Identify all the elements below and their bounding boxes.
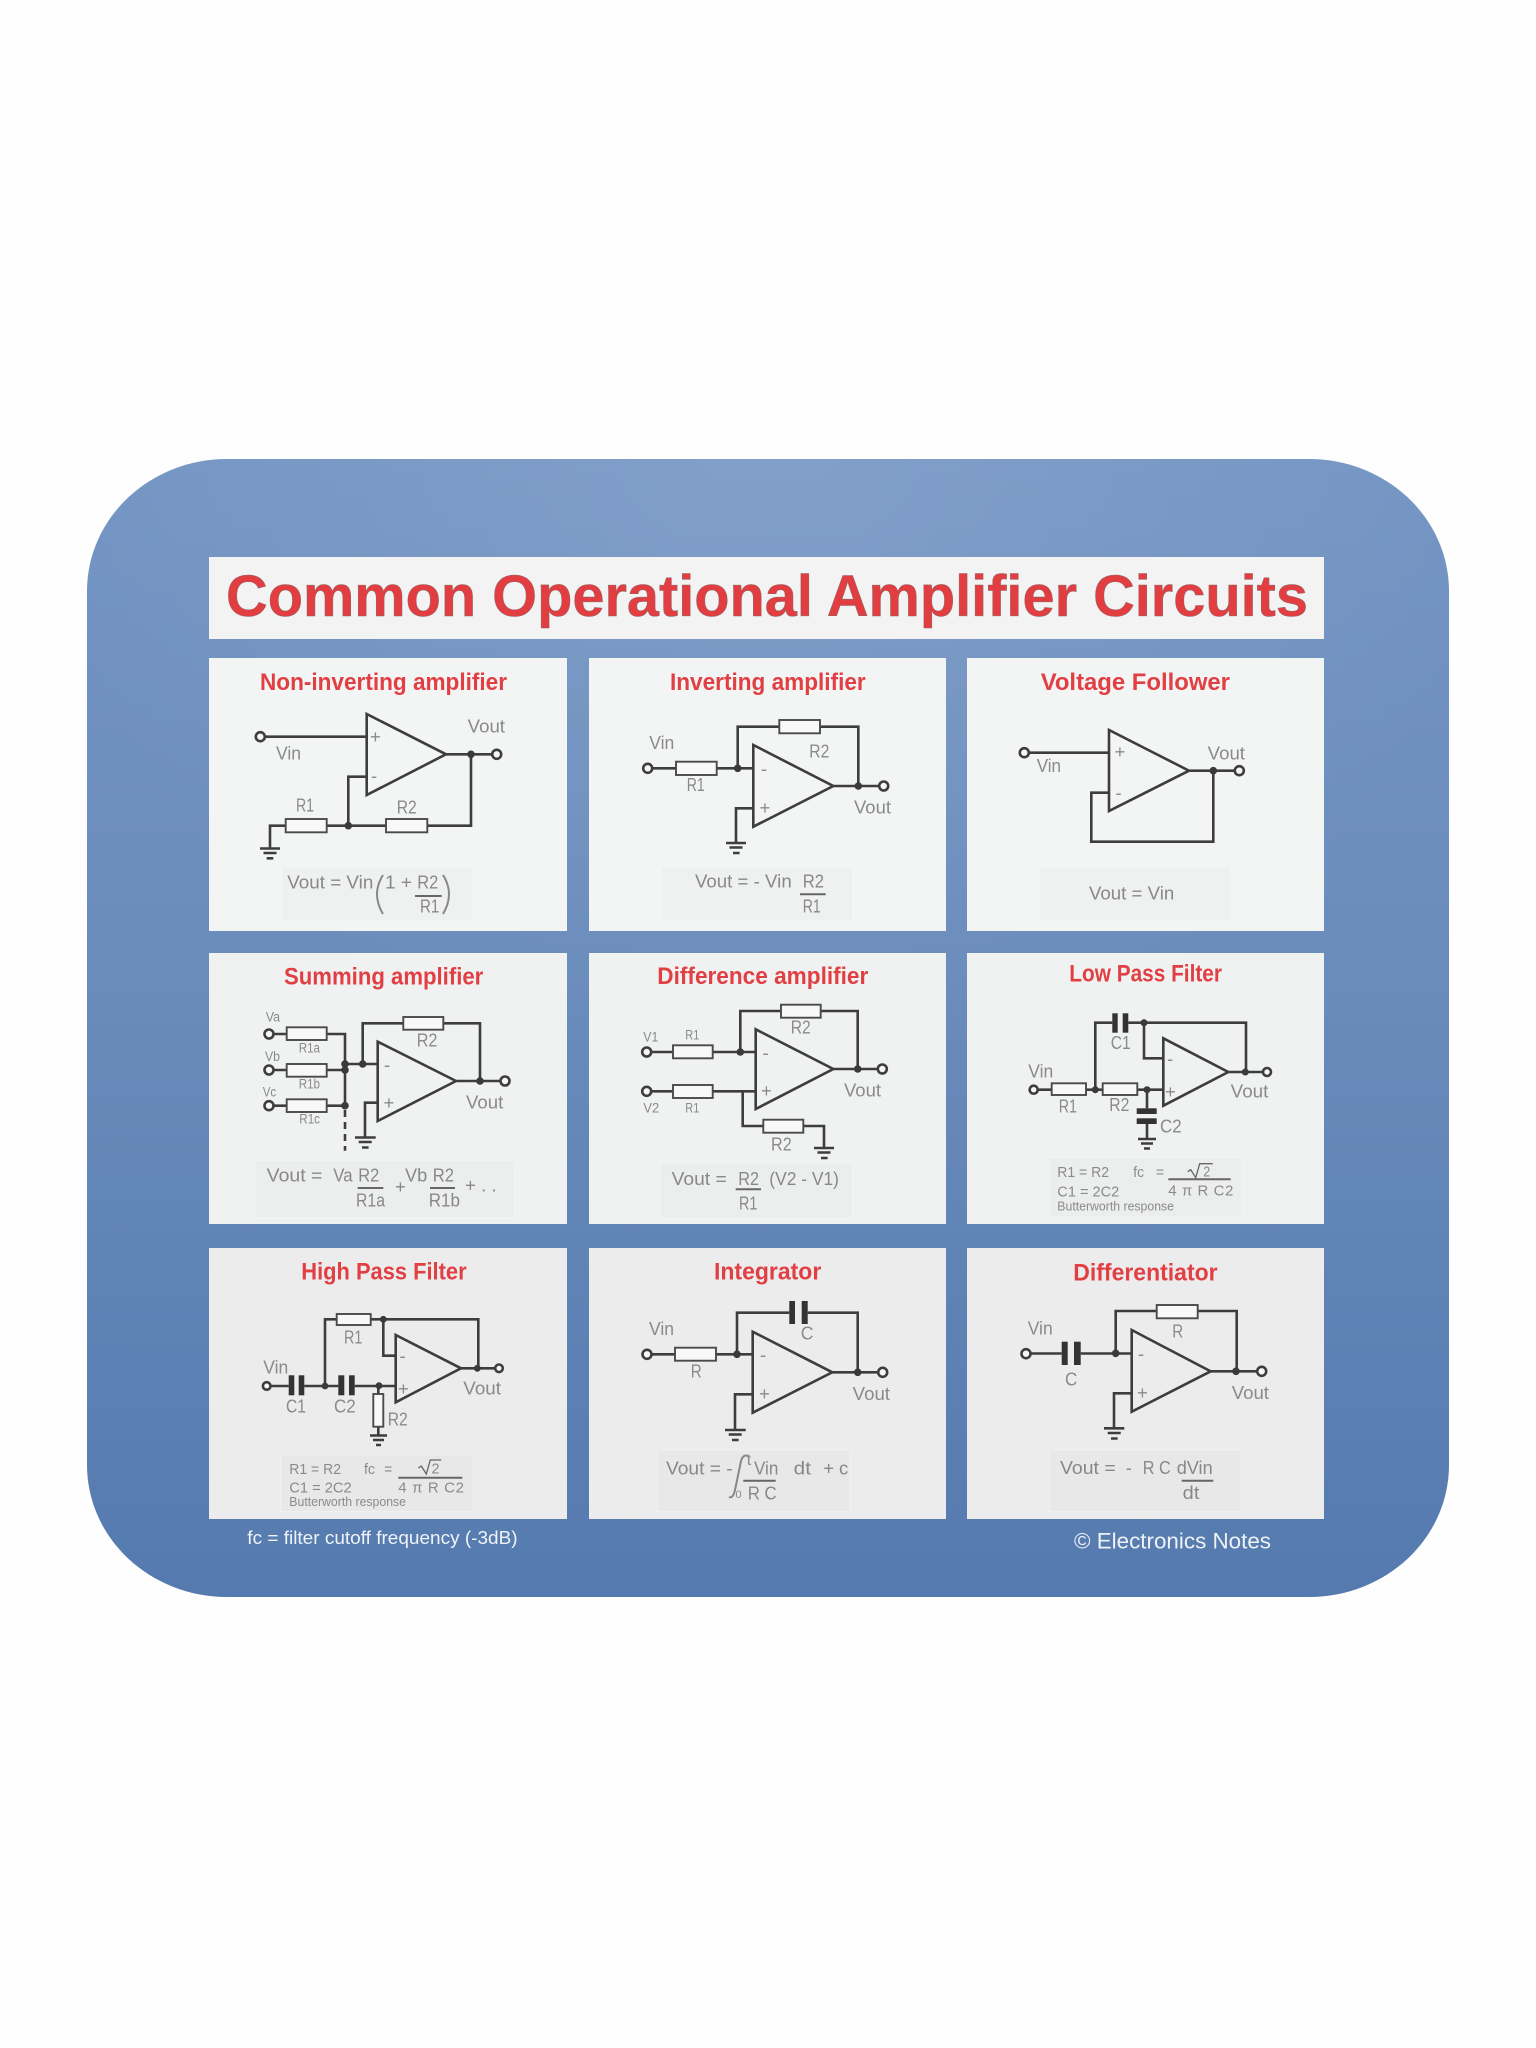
circuit diagram: R1c [299, 1112, 320, 1127]
formula: R2 [803, 871, 824, 892]
circuit diagram [642, 1005, 887, 1158]
panel: summing amplifier [209, 953, 567, 1224]
circuit diagram: - [1138, 1343, 1144, 1364]
formula: dVin [1177, 1457, 1213, 1478]
formula: R2 [358, 1165, 379, 1186]
heading: Non-inverting amplifier [260, 669, 507, 696]
circuit diagram: C [1065, 1368, 1077, 1389]
formula [661, 867, 852, 921]
circuit diagram: Vout [854, 797, 891, 818]
formula [282, 867, 473, 921]
circuit diagram: Vin [263, 1356, 288, 1377]
formula [657, 1450, 850, 1512]
circuit diagram: Va [266, 1010, 280, 1025]
formula: R1 = R2 [1057, 1164, 1109, 1181]
formula: C1 = 2C2 [1057, 1184, 1119, 1201]
circuit diagram: R2 [1109, 1094, 1129, 1115]
circuit diagram: Vout [844, 1080, 881, 1101]
circuit diagram: Vb [265, 1049, 280, 1064]
formula: t [747, 1452, 752, 1469]
panel: difference amplifier [589, 953, 946, 1224]
circuit diagram: V1 [643, 1030, 658, 1045]
formula: dt [1183, 1482, 1199, 1503]
circuit diagram: R1 [344, 1327, 362, 1348]
circuit diagram: R1 [687, 774, 705, 795]
circuit diagram: + [398, 1378, 409, 1399]
formula: Vout = [267, 1165, 322, 1186]
circuit diagram: C1 [1111, 1032, 1131, 1053]
formula: Va [333, 1165, 353, 1186]
circuit diagram [643, 720, 891, 853]
circuit diagram: C2 [334, 1395, 356, 1416]
circuit diagram: Vout [1232, 1382, 1269, 1403]
formula: 2 [1203, 1164, 1210, 1181]
circuit diagram: Vin [649, 1318, 674, 1339]
formula: Vout = Vin [1089, 882, 1174, 903]
formula [255, 1161, 514, 1217]
panel: voltage follower [967, 658, 1324, 931]
circuit diagram: R [1172, 1321, 1183, 1342]
circuit diagram: - [371, 765, 377, 786]
formula: 1 + [385, 872, 412, 893]
formula: R1 [803, 895, 821, 916]
circuit diagram: R1b [299, 1076, 320, 1091]
formula [281, 1455, 473, 1512]
circuit diagram: R2 [388, 1409, 408, 1430]
panel: inverting amplifier [589, 658, 946, 931]
heading: Voltage Follower [1041, 669, 1230, 696]
circuit diagram [642, 1301, 890, 1440]
circuit diagram: R2 [417, 1030, 437, 1051]
panel: high pass filter [209, 1248, 567, 1519]
circuit diagram [1028, 1013, 1271, 1148]
heading: Summing amplifier [284, 963, 483, 990]
circuit diagram: - [384, 1054, 390, 1075]
formula: 0 [736, 1489, 742, 1501]
formula: 2 [432, 1460, 440, 1478]
formula: Vout = [1060, 1457, 1116, 1478]
title banner [209, 557, 1324, 639]
circuit diagram: Vin [1037, 755, 1061, 776]
formula: - [1126, 1457, 1132, 1478]
circuit diagram: + [759, 1383, 770, 1404]
circuit diagram: Vin [649, 732, 674, 753]
circuit diagram: R1 [296, 795, 314, 816]
formula: Butterworth response [1057, 1200, 1174, 1214]
circuit diagram: + [1137, 1382, 1148, 1403]
formula: R1 = R2 [289, 1461, 341, 1478]
circuit diagram: R [691, 1360, 702, 1381]
circuit diagram: R2 [771, 1134, 792, 1155]
formula: R1 [739, 1192, 757, 1213]
circuit diagram: + [761, 1080, 772, 1101]
circuit diagram [263, 1314, 503, 1445]
circuit diagram: Vout [466, 1092, 503, 1113]
circuit diagram: Vout [463, 1377, 501, 1398]
formula: fc [1133, 1164, 1144, 1181]
heading: High Pass Filter [301, 1258, 467, 1285]
formula: R C [748, 1482, 777, 1503]
formula: R1a [356, 1190, 386, 1211]
footnote: filter cutoff: fc = filter cutoff frequency (-3dB) [247, 1527, 518, 1548]
formula: Vb [405, 1165, 427, 1186]
formula: + [395, 1176, 406, 1197]
circuit diagram: R2 [791, 1016, 811, 1037]
circuit diagram: C2 [1160, 1115, 1182, 1136]
formula: (V2 - V1) [769, 1168, 839, 1189]
circuit diagram [263, 1010, 510, 1151]
formula [660, 1162, 852, 1218]
circuit diagram: R2 [397, 796, 417, 817]
circuit diagram: + [1165, 1081, 1176, 1102]
circuit diagram: Vin [276, 742, 301, 763]
circuit diagram: - [1167, 1048, 1173, 1069]
circuit diagram [256, 714, 505, 858]
formula: R2 [433, 1165, 454, 1186]
circuit diagram: - [1116, 782, 1122, 803]
panel: non-inverting amplifier [209, 658, 567, 931]
heading: Low Pass Filter [1069, 961, 1222, 988]
panel: integrator [589, 1248, 946, 1519]
heading: Integrator [714, 1258, 821, 1285]
formula: Butterworth response [289, 1495, 406, 1509]
mouse mat background [87, 459, 1449, 1597]
formula: C1 = 2C2 [289, 1480, 352, 1497]
circuit diagram: Vc [263, 1085, 276, 1100]
formula: dt [794, 1457, 811, 1478]
formula: 4 π R C2 [1168, 1182, 1233, 1199]
circuit diagram: - [762, 1042, 769, 1063]
formula: 4 π R C2 [398, 1480, 464, 1497]
title: Common Operational Amplifier Circuits [226, 564, 1308, 629]
formula: R C [1143, 1457, 1171, 1478]
circuit diagram: C [801, 1322, 813, 1343]
heading: Inverting amplifier [670, 669, 866, 696]
circuit diagram: Vin [1028, 1317, 1053, 1338]
circuit diagram: Vout [1208, 743, 1245, 764]
formula: Vout = Vin [287, 872, 373, 893]
formula: R2 [738, 1168, 759, 1189]
formula [1049, 1157, 1242, 1217]
formula: + . . [465, 1175, 497, 1196]
formula: fc [364, 1461, 375, 1478]
circuit diagram [1020, 730, 1245, 842]
circuit diagram: Vin [1028, 1060, 1053, 1081]
circuit diagram [1022, 1305, 1269, 1438]
circuit diagram: Vout [468, 716, 505, 737]
circuit diagram: Vout [853, 1383, 890, 1404]
formula: Vout = - [666, 1457, 733, 1478]
circuit diagram: R1 [685, 1101, 699, 1116]
formula: R1 [420, 896, 439, 917]
panel: differentiator [967, 1248, 1324, 1519]
formula: R2 [417, 872, 438, 893]
circuit diagram: + [760, 797, 770, 818]
panel: low pass filter [967, 953, 1324, 1224]
formula: Vout = [672, 1168, 727, 1189]
circuit diagram: + [1114, 741, 1125, 762]
circuit diagram: Vout [1231, 1081, 1268, 1102]
formula [1049, 1450, 1242, 1512]
circuit diagram: R1 [1059, 1095, 1077, 1116]
circuit diagram: - [400, 1345, 406, 1366]
circuit diagram: - [760, 1344, 766, 1365]
heading: Difference amplifier [657, 963, 868, 990]
circuit diagram: C1 [286, 1395, 306, 1416]
circuit diagram: + [384, 1092, 394, 1113]
circuit diagram: R2 [809, 740, 829, 761]
formula [1039, 867, 1231, 921]
circuit diagram: V2 [643, 1100, 659, 1115]
formula: Vin [754, 1457, 778, 1478]
formula: + c [823, 1457, 848, 1478]
circuit diagram: R1 [685, 1027, 699, 1042]
formula: = [1156, 1164, 1164, 1181]
circuit diagram: - [761, 758, 767, 779]
circuit diagram: R1a [299, 1040, 320, 1055]
formula: Vout = - Vin [695, 871, 792, 892]
heading: Differentiator [1073, 1260, 1218, 1287]
formula: R1b [429, 1190, 460, 1211]
copyright: © Electronics Notes [1074, 1528, 1271, 1553]
circuit diagram: + [370, 726, 381, 747]
formula: = [384, 1461, 393, 1478]
